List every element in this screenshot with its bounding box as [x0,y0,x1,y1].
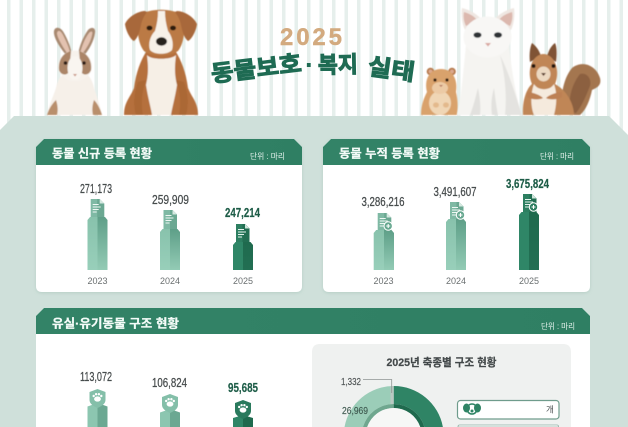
illustration: dog [124,10,198,115]
bar 2025: 95,685: 95,685 [228,381,258,395]
bar 2025: 95,685 [228,381,258,427]
bar 2024: 3,491,607: 3,491,607 [434,185,477,199]
icon: dog face [463,404,481,414]
panel heading: cumulative registrations [323,139,590,165]
bar 2023: 3,286,216 [362,195,405,286]
bar 2024: 106,824 [152,376,187,427]
page teal background [0,116,628,427]
illustration: rabbit [47,28,102,115]
bar 2024: 259,909: 2024 [160,276,180,286]
bar 2025: 247,214: 2025 [233,276,253,286]
bar 2024: 259,909 [152,193,189,286]
bar 2024: 3,491,607 [434,185,477,286]
illustration: squirrel [523,43,600,115]
title: 동물보호·복지 실태 [209,50,416,87]
legend: next item [458,425,558,427]
bar 2023: 271,173: 271,173 [80,182,112,196]
header striped background [0,0,628,140]
panel heading: rescues [36,308,590,334]
panel heading: cumulative registrations: 동물 누적 등록 현황 [339,146,440,160]
data label: 26,969: 26,969 [342,406,368,417]
illustration: cat [457,8,522,115]
title: 동물보호·복지 실태: 복지 [318,51,358,78]
bar 2023: 271,173 [80,182,112,286]
bar 2023: 3,286,216: 2023 [373,276,394,286]
donut chart [345,386,443,427]
panel heading: new registrations [36,139,302,165]
title: year 2025: 2025 [280,24,342,51]
panel heading: new registrations: 단위 : 마리 [250,151,285,161]
bar 2023: 113,072: 113,072 [80,370,112,384]
data label: 1,332: 1,332 [341,377,361,388]
panel: lost and abandoned animal rescues [36,308,590,427]
title: 동물보호·복지 실태: 동물보호 [209,50,303,87]
illustration: hamster [421,68,458,115]
panel: new registrations [36,139,302,292]
panel heading: rescues: 단위 : 마리 [541,321,575,331]
chart title: 2025년 축종별 구조 현황 [386,355,496,369]
legend: dog [458,400,559,419]
bar 2025: 3,675,824: 3,675,824 [506,177,549,191]
panel: 2025 rescue by species [312,344,571,427]
bar 2025: 3,675,824 [506,177,549,286]
panel heading: rescues: 유실·유기동물 구조 현황 [52,316,179,330]
bar 2025: 247,214 [225,206,260,286]
data label: 1,332 [341,377,392,393]
bar 2024: 106,824: 106,824 [152,376,187,390]
bar 2023: 271,173: 2023 [87,276,108,286]
panel heading: cumulative registrations: 단위 : 마리 [540,151,574,161]
title: 동물보호·복지 실태: 실태 [366,53,416,85]
bar 2025: 247,214: 247,214 [225,206,260,220]
bar 2023: 3,286,216: 3,286,216 [362,195,405,209]
bar 2025: 3,675,824: 2025 [519,276,539,286]
bar 2023: 113,072 [80,370,112,427]
title: 동물보호·복지 실태: · [306,55,313,77]
bar 2024: 3,491,607: 2024 [446,276,466,286]
panel: cumulative registrations [323,139,590,292]
legend: dog: 개 [546,404,554,414]
panel heading: new registrations: 동물 신규 등록 현황 [52,146,152,160]
bar 2024: 259,909: 259,909 [152,193,189,207]
